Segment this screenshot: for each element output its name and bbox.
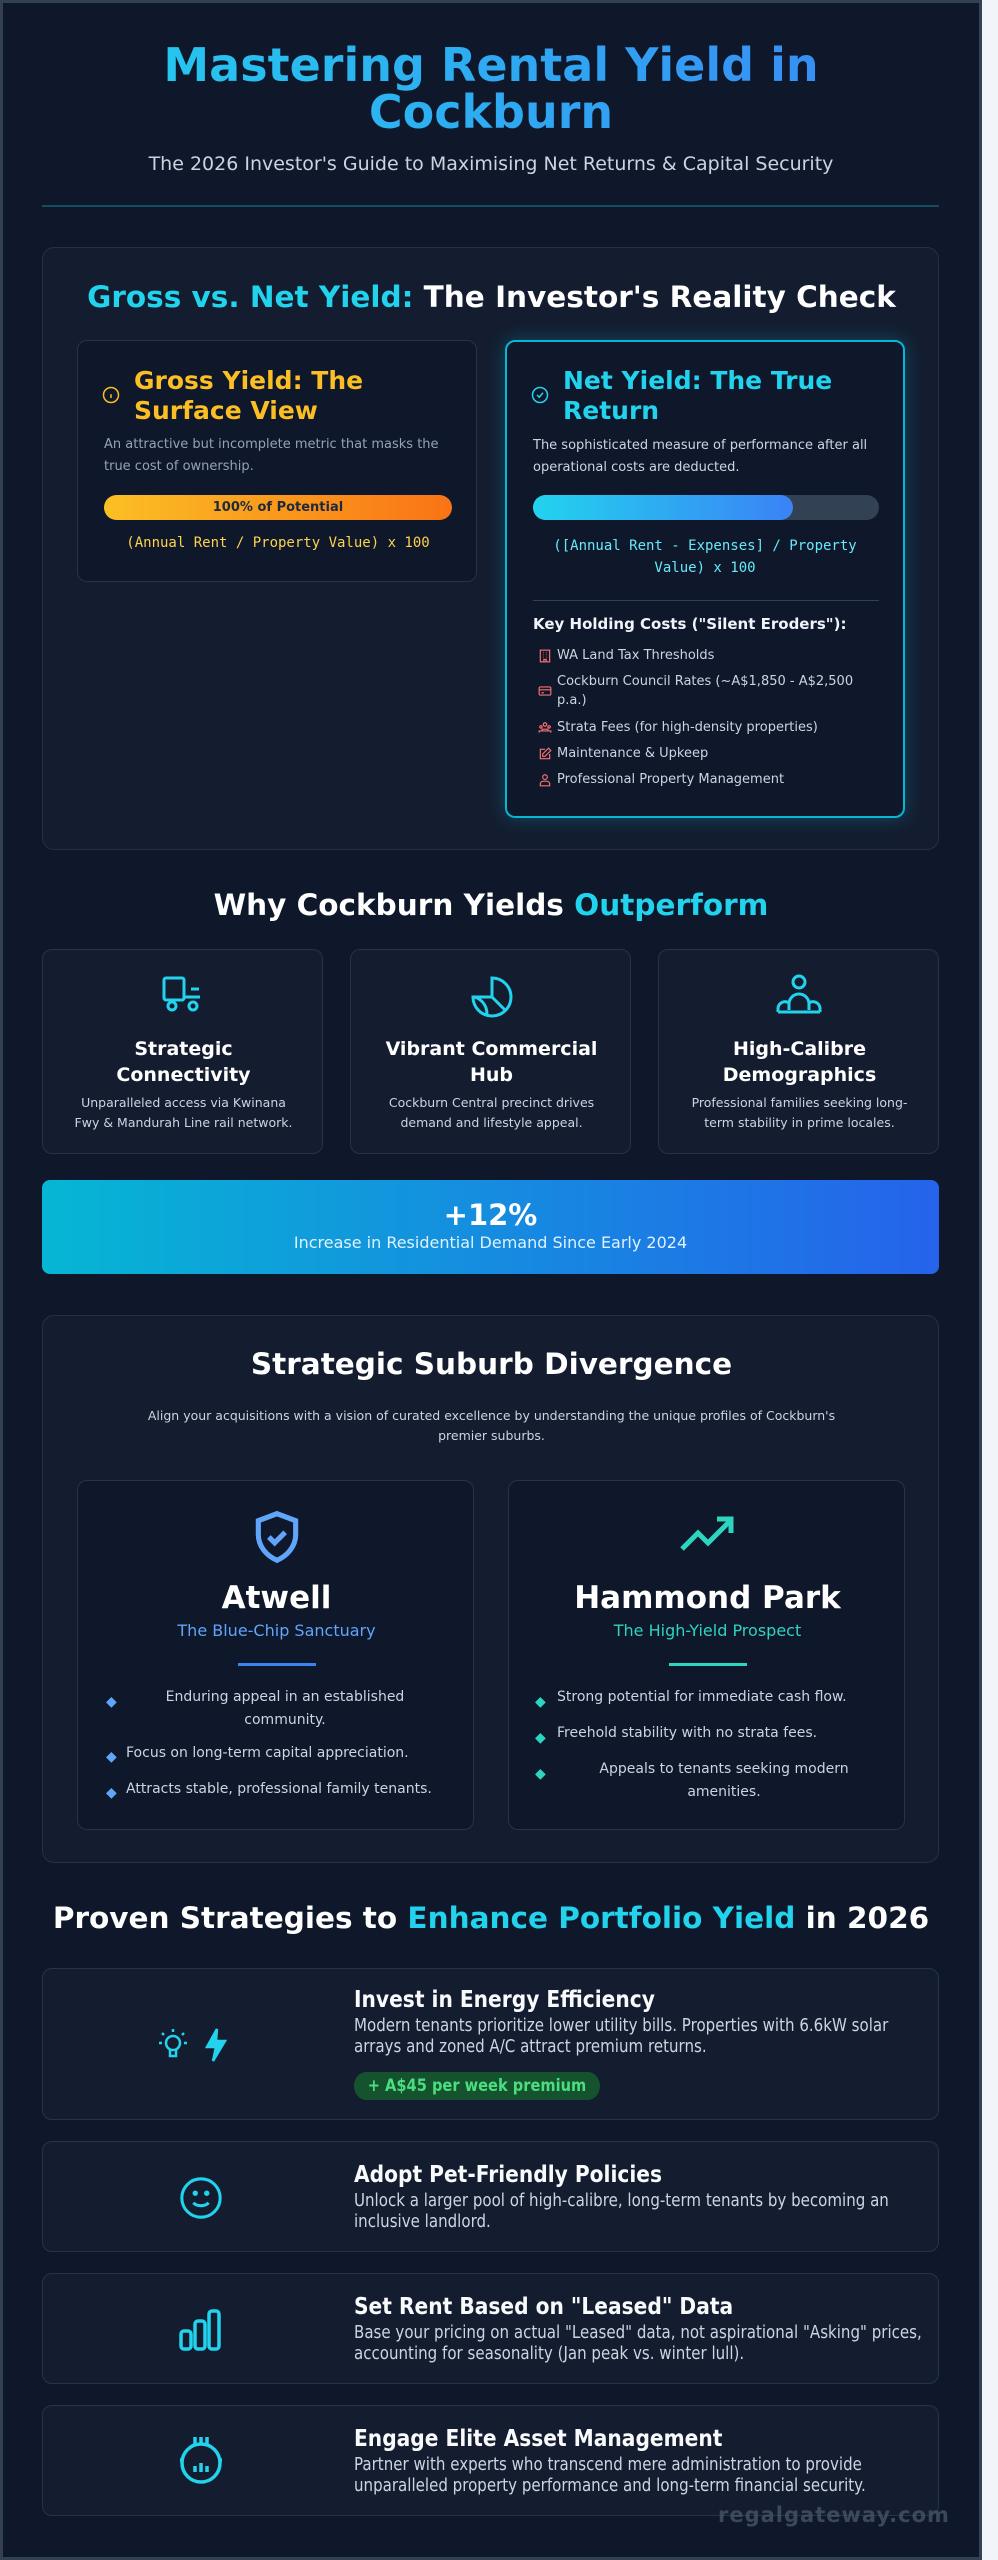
text: pet: Adopt Pet-Friendly Policies <box>354 2160 662 2188</box>
banner: +12%: +12% <box>444 1198 537 1232</box>
card: strategic connectivity <box>42 949 323 1154</box>
list: holding costs: Cockburn Council Rates (~A$1,850 - A$2,500 p.a.) <box>557 674 853 708</box>
text: hammond: Hammond Park <box>574 1580 841 1616</box>
pill: premium <box>354 2072 600 2100</box>
list: hammond <box>535 1689 849 1800</box>
heading: gross: Gross Yield: The <box>134 366 363 395</box>
list: hammond: Strong potential for immediate cash flow. <box>557 1689 847 1705</box>
list: holding costs: Maintenance & Upkeep <box>557 746 708 761</box>
text: management: Engage Elite Asset Management <box>354 2424 722 2452</box>
heading: gross <box>134 366 363 425</box>
list: holding costs: Professional Property Management <box>557 772 784 787</box>
text: energy <box>354 1985 888 2100</box>
icon: people <box>776 974 822 1014</box>
panel: gross vs net <box>42 247 939 850</box>
text: energy: Invest in Energy Efficiency <box>354 1985 655 2013</box>
list: atwell: Focus on long-term capital appreciation. <box>126 1745 409 1761</box>
heading: net <box>563 366 832 425</box>
card: net yield <box>505 340 905 818</box>
text: connectivity: Connectivity <box>116 1064 251 1086</box>
heading: key holding costs: Key Holding Costs ("Silent Eroders"): <box>533 615 846 633</box>
list: holding costs: WA Land Tax Thresholds <box>557 648 714 663</box>
list: atwell: ◆ <box>106 1785 117 1801</box>
bar: gross <box>104 495 452 520</box>
text: net desc: The sophisticated measure of performance after all operational costs are deducted. <box>533 438 867 475</box>
formula: net: ([Annual Rent - Expenses] / Property Value) x 100 <box>553 538 857 576</box>
icon: truck <box>162 976 200 1012</box>
heading: gross: Surface View <box>134 396 318 425</box>
icon: shield <box>256 1510 298 1564</box>
subtitle: The 2026 Investor's Guide to Maximising Net Returns & Capital Security <box>149 153 833 175</box>
list: hammond: ◆ <box>535 1730 546 1746</box>
icon: check <box>532 386 548 404</box>
list: atwell: ◆ <box>106 1749 117 1765</box>
icon: info <box>102 386 120 404</box>
panel: suburb divergence <box>42 1315 939 1863</box>
text: leased: Set Rent Based on "Leased" Data <box>354 2292 733 2320</box>
list: hammond: ◆ <box>535 1766 546 1782</box>
text: hub <box>386 1038 597 1086</box>
watermark: regalgateway.com <box>718 2503 950 2527</box>
list: hammond: ◆ <box>535 1694 546 1710</box>
list: hammond: Freehold stability with no strata fees. <box>557 1725 817 1741</box>
banner: +12%: Increase in Residential Demand Since Early 2024 <box>294 1233 687 1252</box>
icon: management <box>180 2437 222 2484</box>
icon: trend <box>680 1516 734 1551</box>
text: suburb intro: Align your acquisitions with a vision of curated excellence by understanding the unique profiles of Cockburn's premier suburbs. <box>148 1408 835 1443</box>
text: demographics: High-Calibre <box>733 1038 866 1060</box>
text: connectivity <box>116 1038 251 1086</box>
heading: proven strategies: Proven Strategies to Enhance Portfolio Yield in 2026 <box>53 1901 929 1935</box>
text: hub: Vibrant Commercial <box>386 1038 597 1060</box>
heading: net: Net Yield: The True <box>563 366 832 395</box>
text: management: Partner with experts who transcend mere administration to provide unparalleled property performance and long-term financial security. <box>354 2455 866 2496</box>
text: connectivity: Strategic <box>134 1038 233 1060</box>
card: strategic connectivity: Unparalleled access via Kwinana Fwy & Mandurah Line rail network. <box>75 1095 292 1130</box>
list: atwell: ◆ <box>106 1694 117 1710</box>
card: hammond park: The High-Yield Prospect <box>614 1621 801 1640</box>
title: Mastering Rental Yield in <box>163 38 819 92</box>
card: hammond park <box>508 1480 905 1830</box>
bar: net <box>533 495 879 520</box>
card: commercial hub: Cockburn Central precinct drives demand and lifestyle appeal. <box>389 1095 594 1130</box>
card: commercial hub <box>350 949 631 1154</box>
text: gross desc: An attractive but incomplete metric that masks the true cost of ownership. <box>104 437 439 474</box>
list: holding costs: Strata Fees (for high-density properties) <box>557 720 818 735</box>
title <box>0 42 982 136</box>
heading: why cockburn: Why Cockburn Yields Outperform <box>214 888 768 922</box>
list: atwell <box>106 1689 432 1801</box>
text: pet <box>354 2160 889 2232</box>
list: hammond: Appeals to tenants seeking modern amenities. <box>599 1761 849 1800</box>
card: atwell: The Blue-Chip Sanctuary <box>177 1621 376 1640</box>
card: leased data <box>42 2273 939 2384</box>
icon: bar chart <box>179 2309 221 2351</box>
heading: gross vs net: Gross vs. Net Yield: The Investor's Reality Check <box>87 280 896 314</box>
card: pet friendly <box>42 2141 939 2252</box>
title: Cockburn <box>369 85 613 139</box>
list: holding costs <box>538 648 853 787</box>
icon: smile <box>180 2177 222 2219</box>
card: demographics: Professional families seeking long-term stability in prime locales. <box>692 1095 907 1130</box>
pill: premium: + A$45 per week premium <box>368 2076 586 2096</box>
icon: pie <box>472 976 512 1018</box>
card: demographics <box>658 949 939 1154</box>
text: pet: Unlock a larger pool of high-calibre, long-term tenants by becoming an inclusive landlord. <box>354 2191 889 2232</box>
card: gross yield <box>77 340 477 582</box>
text: management <box>354 2424 866 2496</box>
text: energy: Modern tenants prioritize lower utility bills. Properties with 6.6kW solar arrays and zoned A/C attract premium returns. <box>354 2016 888 2057</box>
list: atwell: Enduring appeal in an established community. <box>166 1689 404 1728</box>
text: leased: Base your pricing on actual "Leased" data, not aspirational "Asking" prices, accounting for seasonality (Jan peak vs. winter lull). <box>354 2323 922 2364</box>
text: demographics <box>723 1038 876 1086</box>
icon: bulb + bolt <box>159 2028 228 2062</box>
card: energy efficiency <box>42 1968 939 2120</box>
card: asset management <box>42 2405 939 2516</box>
heading: suburb: Strategic Suburb Divergence <box>251 1347 732 1381</box>
heading: net: Return <box>563 396 659 425</box>
list: atwell: Attracts stable, professional family tenants. <box>126 1781 432 1797</box>
text: leased <box>354 2292 922 2364</box>
text: atwell: Atwell <box>222 1580 331 1616</box>
banner: +12% <box>42 1180 939 1274</box>
card: atwell <box>77 1480 474 1830</box>
text: hub: Hub <box>470 1064 513 1086</box>
text: demographics: Demographics <box>723 1064 876 1086</box>
formula: gross: (Annual Rent / Property Value) x 100 <box>126 535 430 551</box>
bar: gross: 100% of Potential <box>213 500 343 515</box>
